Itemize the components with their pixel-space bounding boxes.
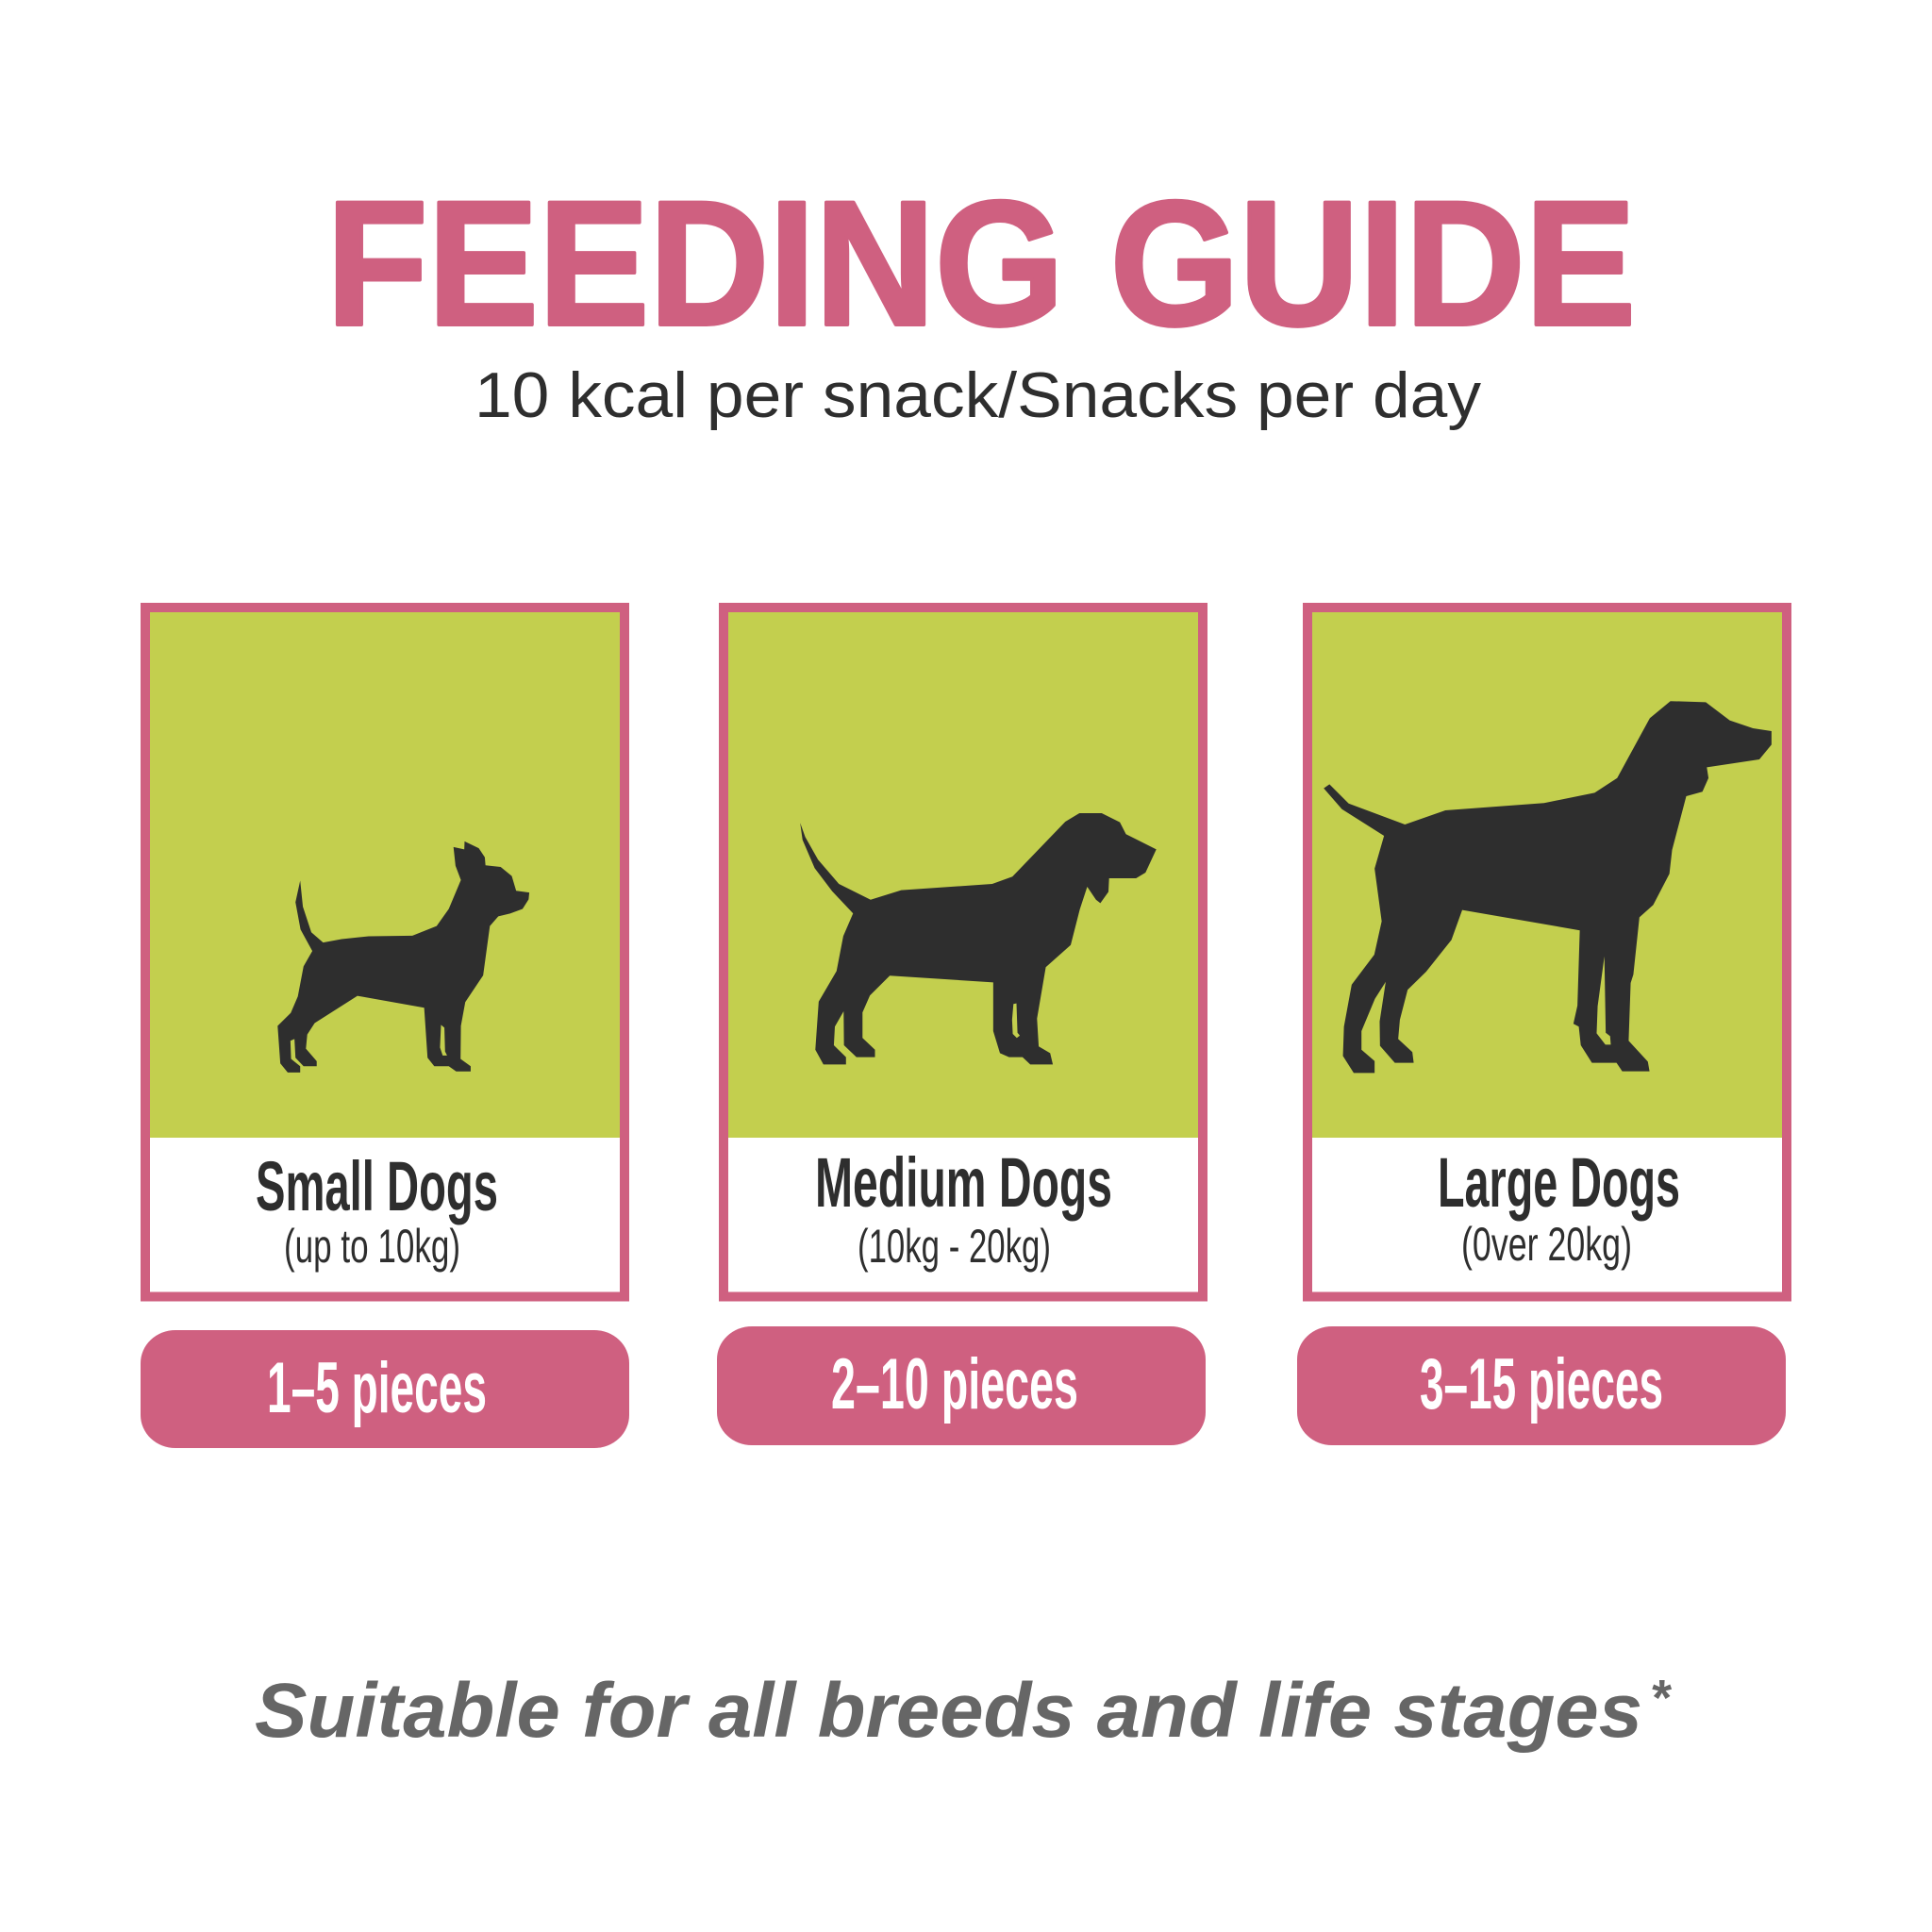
small dogs green background <box>150 612 620 1138</box>
icon: small dog silhouette <box>277 841 529 1073</box>
small dogs heading: Small Dogs <box>256 1147 498 1225</box>
pill: small dogs portion <box>141 1330 629 1448</box>
large dogs weight: (0ver 20kg) <box>1461 1218 1632 1271</box>
medium dogs weight: (10kg - 20kg) <box>858 1220 1051 1273</box>
panel: medium dogs <box>724 608 1203 1296</box>
footer note: Suitable for all breeds and life stages <box>255 1668 1642 1754</box>
medium dogs frame <box>724 608 1203 1296</box>
large dogs heading: Large Dogs <box>1438 1143 1680 1222</box>
medium dogs pieces: 2–10 pieces <box>831 1344 1078 1424</box>
large dogs pieces: 3–15 pieces <box>1420 1344 1663 1424</box>
large dogs green background <box>1312 612 1782 1138</box>
medium dogs green background <box>728 612 1198 1138</box>
small dogs pieces: 1–5 pieces <box>267 1348 487 1428</box>
panel: large dogs <box>1307 608 1787 1296</box>
subtitle: 10 kcal per snack/Snacks per day <box>475 359 1481 431</box>
large dogs frame <box>1307 608 1787 1296</box>
medium dogs heading: Medium Dogs <box>815 1143 1112 1222</box>
icon: medium dog silhouette <box>800 813 1157 1064</box>
title: FEEDING GUIDE <box>326 164 1636 362</box>
small dogs weight: (up to 10kg) <box>284 1220 460 1273</box>
pill: medium dogs portion <box>717 1326 1206 1445</box>
icon: large dog silhouette <box>1324 701 1772 1073</box>
pill: large dogs portion <box>1297 1326 1786 1445</box>
footer note: * <box>1650 1670 1673 1726</box>
small dogs frame <box>145 608 625 1296</box>
panel: small dogs <box>145 608 625 1296</box>
